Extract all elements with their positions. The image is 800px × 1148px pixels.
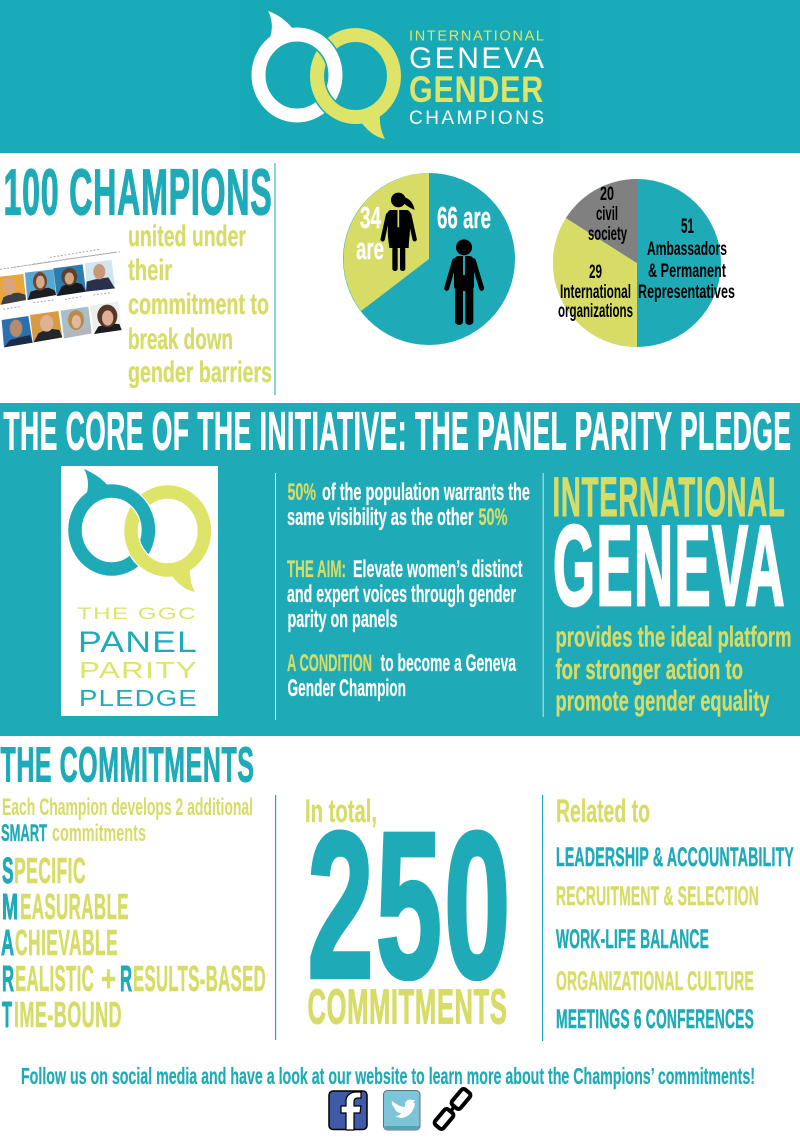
logo: International Geneva Gender Champions: GENDER: [409, 69, 544, 110]
label: 51 ambassadors: Ambassadors: [647, 238, 727, 260]
list: smart acronym: CHIEVABLE: [15, 922, 118, 963]
label: 29 international organizations: [558, 261, 633, 322]
label: 20 civil society: [588, 183, 627, 245]
logo card: GGC panel parity pledge: PANEL: [78, 626, 198, 659]
list: smart acronym: EASURABLE: [20, 886, 129, 927]
list: smart acronym: [1, 850, 266, 1035]
panel: 250 commitments: COMMITMENTS: [308, 980, 508, 1034]
label: 34 are: 34: [360, 200, 381, 235]
logo card: GGC panel parity pledge: THE GGC: [77, 604, 197, 623]
text: a condition: [287, 650, 516, 702]
list: smart acronym: R: [120, 958, 132, 999]
text: ideal platform: [556, 622, 792, 718]
text: the aim: [287, 556, 523, 633]
label: 34 are: [356, 200, 384, 266]
text: a condition: to become a Geneva: [380, 650, 516, 677]
text: 100 CHAMPIONS: [4, 156, 272, 228]
icon: woman: [383, 193, 415, 271]
pie chart: gender split: [343, 173, 515, 345]
text: the aim: THE AIM:: [287, 556, 346, 583]
logo card: GGC panel parity pledge: [61, 466, 218, 716]
text: the aim: parity on panels: [288, 606, 398, 633]
text: a condition: A CONDITION: [287, 650, 372, 677]
logo: International Geneva Gender Champions: INTERNATIONAL: [409, 28, 544, 44]
label: 29 international organizations: organizations: [558, 300, 633, 322]
list: smart acronym: A: [1, 922, 14, 963]
label: 20 civil society: civil: [596, 203, 618, 225]
text: united under their commitment: united under: [128, 220, 246, 253]
panel: smart commitments: Each Champion develops 2 additional: [2, 794, 253, 821]
list: smart acronym: T: [2, 994, 12, 1035]
logo: International Geneva Gender Champions: CHAMPIONS: [409, 108, 544, 129]
label: 34 are: are: [356, 231, 384, 266]
icon: twitter: [384, 1090, 420, 1130]
panel: smart commitments: SMART: [1, 820, 47, 847]
icon: man: [447, 239, 482, 325]
label: 51 ambassadors: & Permanent: [648, 260, 726, 282]
text: united under their commitment: their: [128, 254, 172, 287]
panel: 100 champions: [0, 156, 272, 389]
list: smart acronym: PECIFIC: [14, 850, 86, 891]
list: smart acronym: M: [2, 886, 18, 927]
list: smart acronym: S: [2, 850, 14, 891]
text: united under their commitment: break down: [128, 323, 233, 356]
logo card: GGC panel parity pledge: PLEDGE: [79, 685, 198, 711]
icon: facebook: [329, 1091, 367, 1130]
logo: International Geneva Gender Champions: [252, 11, 544, 139]
list: smart acronym: R: [2, 958, 14, 999]
list: smart acronym: EALISTIC: [15, 958, 94, 999]
logo card: GGC panel parity pledge: PARITY: [79, 657, 198, 683]
panel: related topics: [556, 793, 794, 1034]
label: 51 ambassadors: [638, 215, 735, 303]
header band: [0, 0, 800, 153]
label: 51 ambassadors: 51: [681, 215, 694, 238]
panel: panel parity pledge band: [0, 402, 800, 736]
panel: smart commitments: [1, 794, 266, 1035]
text: 50 percent: of the population warrants the: [322, 479, 530, 506]
text: 50 percent: 50%: [478, 504, 508, 531]
panel: 250 commitments: [305, 790, 512, 1034]
panel: related topics: Related to: [556, 793, 650, 829]
text: united under their commitment: gender barriers: [128, 356, 272, 389]
list: smart acronym: +: [101, 958, 116, 999]
icon: link chain: [433, 1088, 472, 1130]
text: united under their commitment: [128, 220, 272, 389]
label: 20 civil society: society: [588, 223, 627, 245]
heading: the commitments: THE COMMITMENTS: [0, 738, 255, 792]
logo: International Geneva Gender Champions: GENEVA: [409, 42, 544, 75]
text: ESULTS-BASED: [133, 958, 266, 999]
text: the aim: and expert voices through gender: [287, 581, 516, 608]
label: 29 international organizations: International: [560, 281, 631, 303]
text: 50 percent: same visibility as the other: [287, 504, 474, 531]
text: 50 percent: [287, 479, 530, 531]
text: a condition: Gender Champion: [288, 675, 406, 702]
text: the aim: Elevate women’s distinct: [353, 556, 523, 583]
label: 66 are: 66 are: [437, 200, 491, 235]
list: smart acronym: IME-BOUND: [14, 994, 122, 1035]
label: 51 ambassadors: Representatives: [638, 281, 735, 303]
big number: 250: 250: [308, 790, 512, 1022]
panel: 250 commitments: In total,: [305, 793, 377, 829]
photo collage of champions: [0, 249, 122, 347]
text: 50 percent: 50%: [288, 479, 316, 506]
label: 20 civil society: 20: [600, 183, 614, 205]
label: 29 international organizations: 29: [589, 261, 602, 283]
text: united under their commitment: commitment to: [128, 288, 269, 321]
pie chart: champion types: [553, 179, 735, 347]
panel: smart commitments: commitments: [52, 820, 146, 847]
